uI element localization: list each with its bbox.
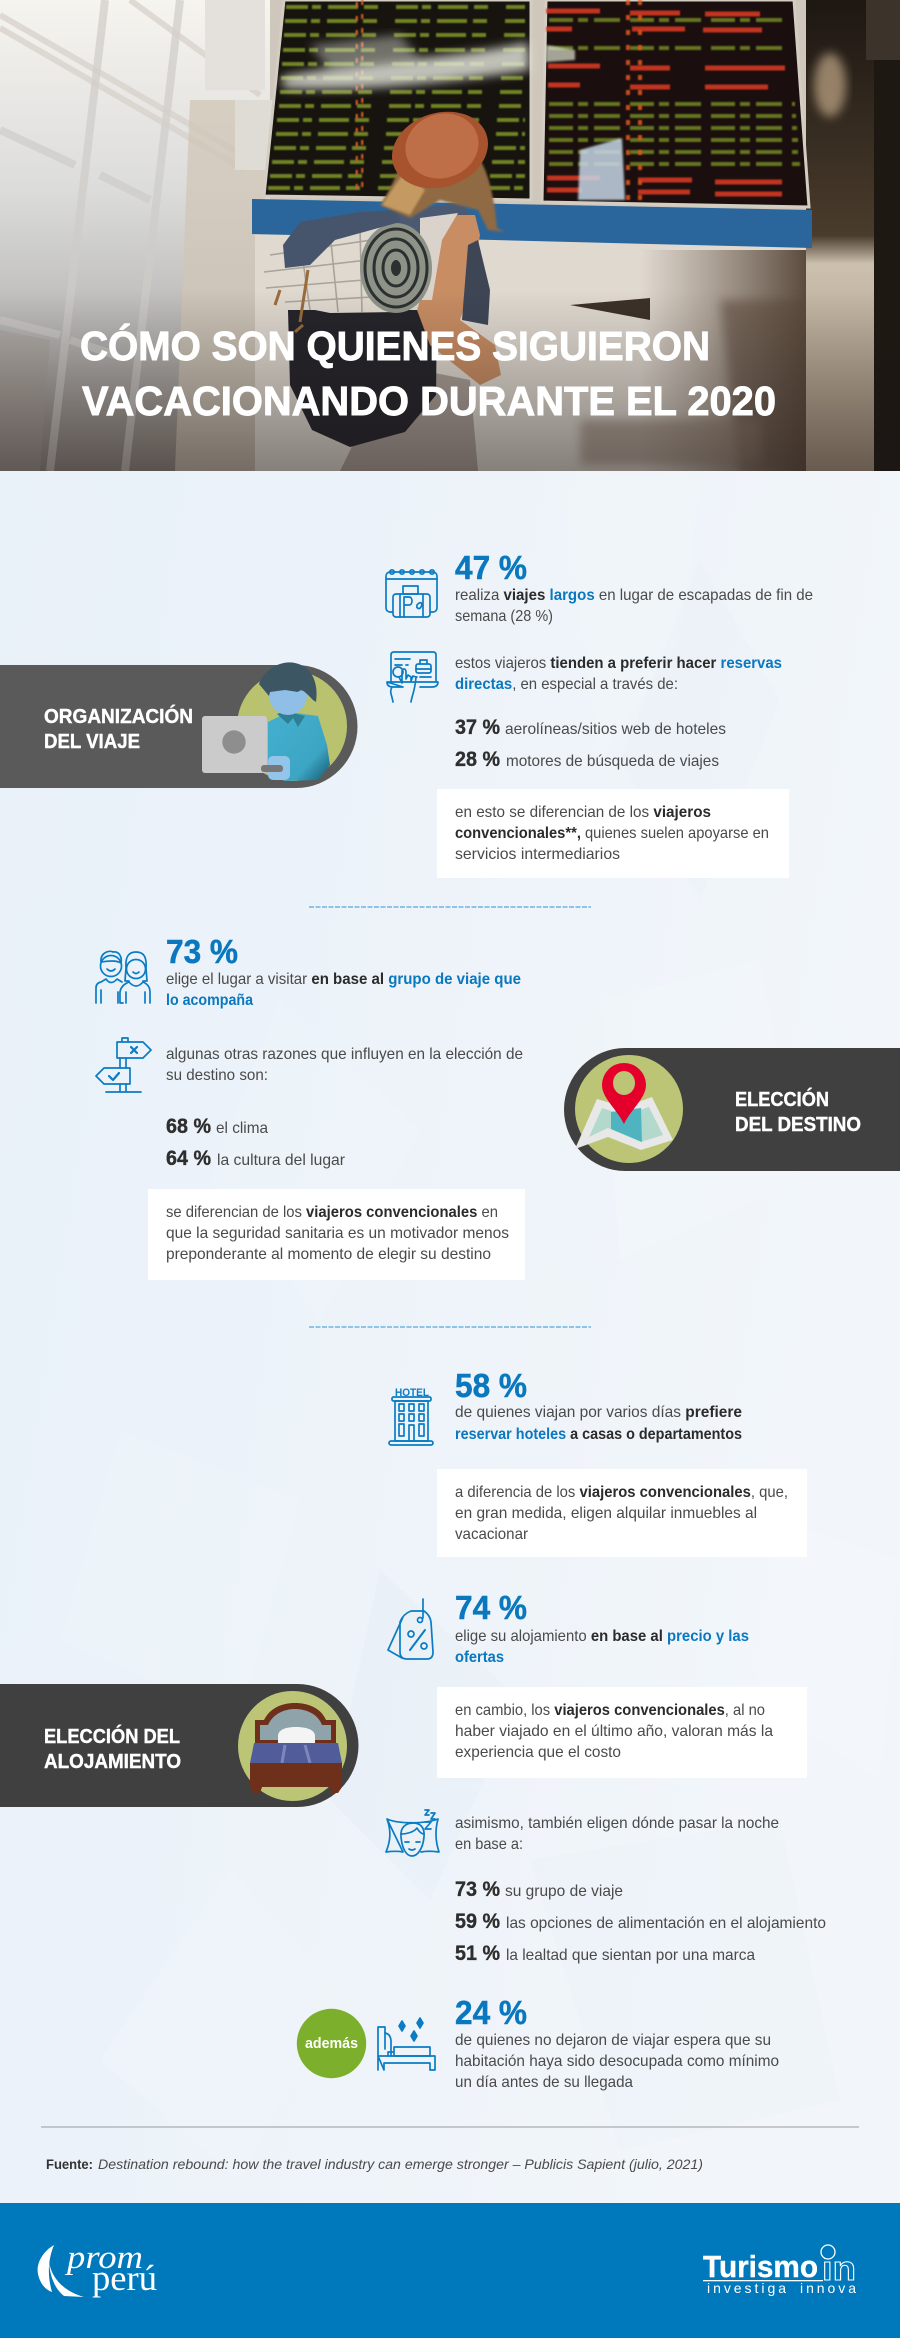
section pill: elección del alojamiento: ELECCIÓN DEL — [44, 1724, 180, 1748]
section pill: elección del alojamiento: ALOJAMIENTO — [44, 1751, 181, 1773]
logo: promperú: perú — [92, 2258, 157, 2298]
callout: viajeros convencionales: convencionales**, quienes suelen apoyarse en — [455, 825, 769, 842]
logo: turismo in — [703, 2245, 856, 2296]
icon: hotel: HOTEL — [395, 1387, 429, 1399]
hero photo: traveller at airport departures board — [0, 0, 900, 471]
text: otras razones — [166, 1046, 523, 1084]
text: otras razones: algunas otras razones que influyen en la elección de — [166, 1046, 523, 1063]
section pill: elección del alojamiento — [0, 1684, 358, 1807]
text: otras razones: su destino son: — [166, 1067, 268, 1084]
icon: signpost — [96, 1038, 151, 1092]
icon: clean bed — [378, 2018, 435, 2070]
hero dark fade — [0, 307, 874, 471]
text: reservas directas: estos viajeros tienden a preferir hacer reservas — [455, 655, 782, 672]
stat list: canales de reserva: 37 % — [455, 716, 500, 739]
icon: hotel — [389, 1387, 433, 1445]
panel: organización del viaje — [0, 549, 813, 878]
stat list: razones de destino: 68 % — [166, 1115, 211, 1138]
section pill: organización del viaje: ORGANIZACIÓN — [44, 704, 193, 728]
icon: price tag — [388, 1599, 433, 1659]
woman's dress — [340, 370, 478, 471]
stat: 74 % precio y ofertas: elige su alojamiento en base al precio y las — [455, 1628, 749, 1645]
source note: Fuente: — [46, 2156, 93, 2172]
logo: turismo in: investiga — [707, 2280, 786, 2296]
icon: calendar and suitcase — [386, 570, 437, 617]
stat: 74 % precio y ofertas — [455, 1589, 749, 1666]
badge: además: además — [305, 2035, 358, 2052]
stat: 24 % habitación desocupada: un día antes de su llegada — [455, 2074, 633, 2091]
stat list: factores de alojamiento: las opciones de alimentación en el alojamiento — [506, 1915, 826, 1932]
section pill: elección del destino: DEL DESTINO — [735, 1114, 861, 1136]
text: asimismo — [455, 1815, 779, 1853]
stat list: canales de reserva: motores de búsqueda de viajes — [506, 753, 719, 770]
stat list: factores de alojamiento: 59 % — [455, 1910, 500, 1933]
callout: alquilar inmuebles: vacacionar — [455, 1526, 528, 1543]
stat: 74 % precio y ofertas: ofertas — [455, 1649, 504, 1666]
blue band — [252, 199, 812, 248]
footer — [0, 2203, 900, 2338]
stat list: razones de destino: la cultura del lugar — [217, 1152, 345, 1169]
callout: viajeros convencionales: servicios intermediarios — [455, 846, 620, 863]
right column — [806, 0, 900, 471]
stat: 58 % reservar hoteles: reservar hoteles a casas o departamentos — [455, 1426, 742, 1443]
stat list: razones de destino — [166, 1115, 345, 1170]
callout: experiencia y costo — [437, 1687, 807, 1778]
stat list: razones de destino: el clima — [216, 1120, 268, 1137]
callout: viajeros convencionales — [437, 789, 789, 878]
page background — [0, 471, 900, 2203]
stat list: factores de alojamiento: 73 % — [455, 1878, 500, 1901]
stat: 73 % grupo de viaje — [166, 933, 521, 1009]
callout: alquilar inmuebles: a diferencia de los viajeros convencionales, que, — [455, 1484, 788, 1501]
callout: experiencia y costo: en cambio, los viajeros convencionales, al no — [455, 1702, 765, 1719]
stat: 24 % habitación desocupada: de quienes no dejaron de viajar espera que su — [455, 2032, 771, 2049]
panel: elección del destino — [96, 933, 900, 1280]
callout: seguridad sanitaria — [148, 1189, 525, 1280]
stat: 74 % precio y ofertas: 74 % — [455, 1589, 527, 1626]
callout: experiencia y costo: experiencia que el costo — [455, 1744, 621, 1761]
stat: 24 % habitación desocupada: 24 % — [455, 1994, 527, 2031]
panel: elección del alojamiento — [0, 1367, 826, 2091]
woman's hat — [392, 112, 488, 188]
callout: seguridad sanitaria: que la seguridad sanitaria es un motivador menos — [166, 1225, 509, 1242]
logo: promperú — [38, 2240, 157, 2298]
stat: 73 % grupo de viaje: lo acompaña — [166, 992, 253, 1009]
callout: seguridad sanitaria: se diferencian de los viajeros convencionales en — [166, 1204, 498, 1221]
stat list: factores de alojamiento — [455, 1878, 826, 1965]
flight boards — [264, 0, 809, 207]
rolled sleeping mat — [262, 210, 432, 332]
callout: alquilar inmuebles: en gran medida, eligen alquilar inmuebles al — [455, 1505, 757, 1522]
icon: couple — [96, 951, 150, 1003]
logo: turismo in: in — [822, 2250, 856, 2288]
stat list: canales de reserva: aerolíneas/sitios web de hoteles — [505, 721, 726, 738]
stat: 47 % viajes largos: 47 % — [455, 549, 527, 586]
stat list: factores de alojamiento: la lealtad que sientan por una marca — [506, 1947, 755, 1964]
callout: viajeros convencionales: en esto se diferencian de los viajeros — [455, 804, 711, 821]
section pill: organización del viaje — [0, 662, 357, 788]
windows on the left — [0, 0, 277, 471]
section pill: organización del viaje: DEL VIAJE — [44, 731, 140, 753]
stat: 24 % habitación desocupada — [455, 1994, 779, 2091]
stat: 47 % viajes largos: realiza viajes largos en lugar de escapadas de fin de — [455, 587, 813, 604]
logo: turismo in: innova — [800, 2280, 856, 2296]
callout: alquilar inmuebles — [437, 1469, 807, 1557]
title: CÓMO SON QUIENES SIGUIERON — [80, 323, 710, 369]
icon: sleeping head on pillow — [386, 1810, 439, 1856]
source note: Destination rebound: how the travel industry can emerge stronger – Publicis Sapient (julio, 2021) — [98, 2156, 703, 2172]
text: reservas directas: directas, en especial a través de: — [455, 676, 678, 693]
text: asimismo: asimismo, también eligen dónde pasar la noche — [455, 1815, 779, 1832]
stat list: factores de alojamiento: su grupo de viaje — [505, 1883, 623, 1900]
title — [80, 323, 776, 424]
section pill: elección del destino: ELECCIÓN — [735, 1087, 829, 1111]
lower wall — [255, 235, 815, 471]
stat: 73 % grupo de viaje: 73 % — [166, 933, 238, 970]
stat: 73 % grupo de viaje: elige el lugar a visitar en base al grupo de viaje que — [166, 971, 521, 988]
stat list: canales de reserva: 28 % — [455, 748, 500, 771]
text: asimismo: en base a: — [455, 1836, 523, 1853]
badge: además — [297, 2009, 366, 2078]
woman's backpack — [288, 203, 478, 447]
stat: 58 % reservar hoteles — [455, 1367, 742, 1443]
section pill: elección del destino — [564, 1048, 900, 1171]
stat: 58 % reservar hoteles: de quienes viajan por varios días prefiere — [455, 1404, 742, 1421]
title: VACACIONANDO DURANTE EL 2020 — [82, 378, 776, 424]
logo: turismo in: Turismo — [703, 2249, 818, 2284]
woman's arm and back — [417, 215, 501, 385]
stat list: razones de destino: 64 % — [166, 1147, 211, 1170]
stat: 58 % reservar hoteles: 58 % — [455, 1367, 527, 1404]
callout: seguridad sanitaria: preponderante al momento de elegir su destino — [166, 1246, 491, 1263]
woman's hair — [380, 160, 505, 232]
stat: 24 % habitación desocupada: habitación haya sido desocupada como mínimo — [455, 2053, 779, 2070]
text: reservas directas — [455, 655, 782, 693]
stat: 47 % viajes largos — [455, 549, 813, 625]
logo: promperú: prom — [65, 2240, 143, 2276]
stat list: factores de alojamiento: 51 % — [455, 1942, 500, 1965]
icon: online booking — [387, 652, 438, 702]
stat: 47 % viajes largos: semana (28 %) — [455, 608, 553, 625]
callout: experiencia y costo: haber viajado en el último año, valoran más la — [455, 1723, 773, 1740]
stat list: canales de reserva — [455, 716, 726, 771]
